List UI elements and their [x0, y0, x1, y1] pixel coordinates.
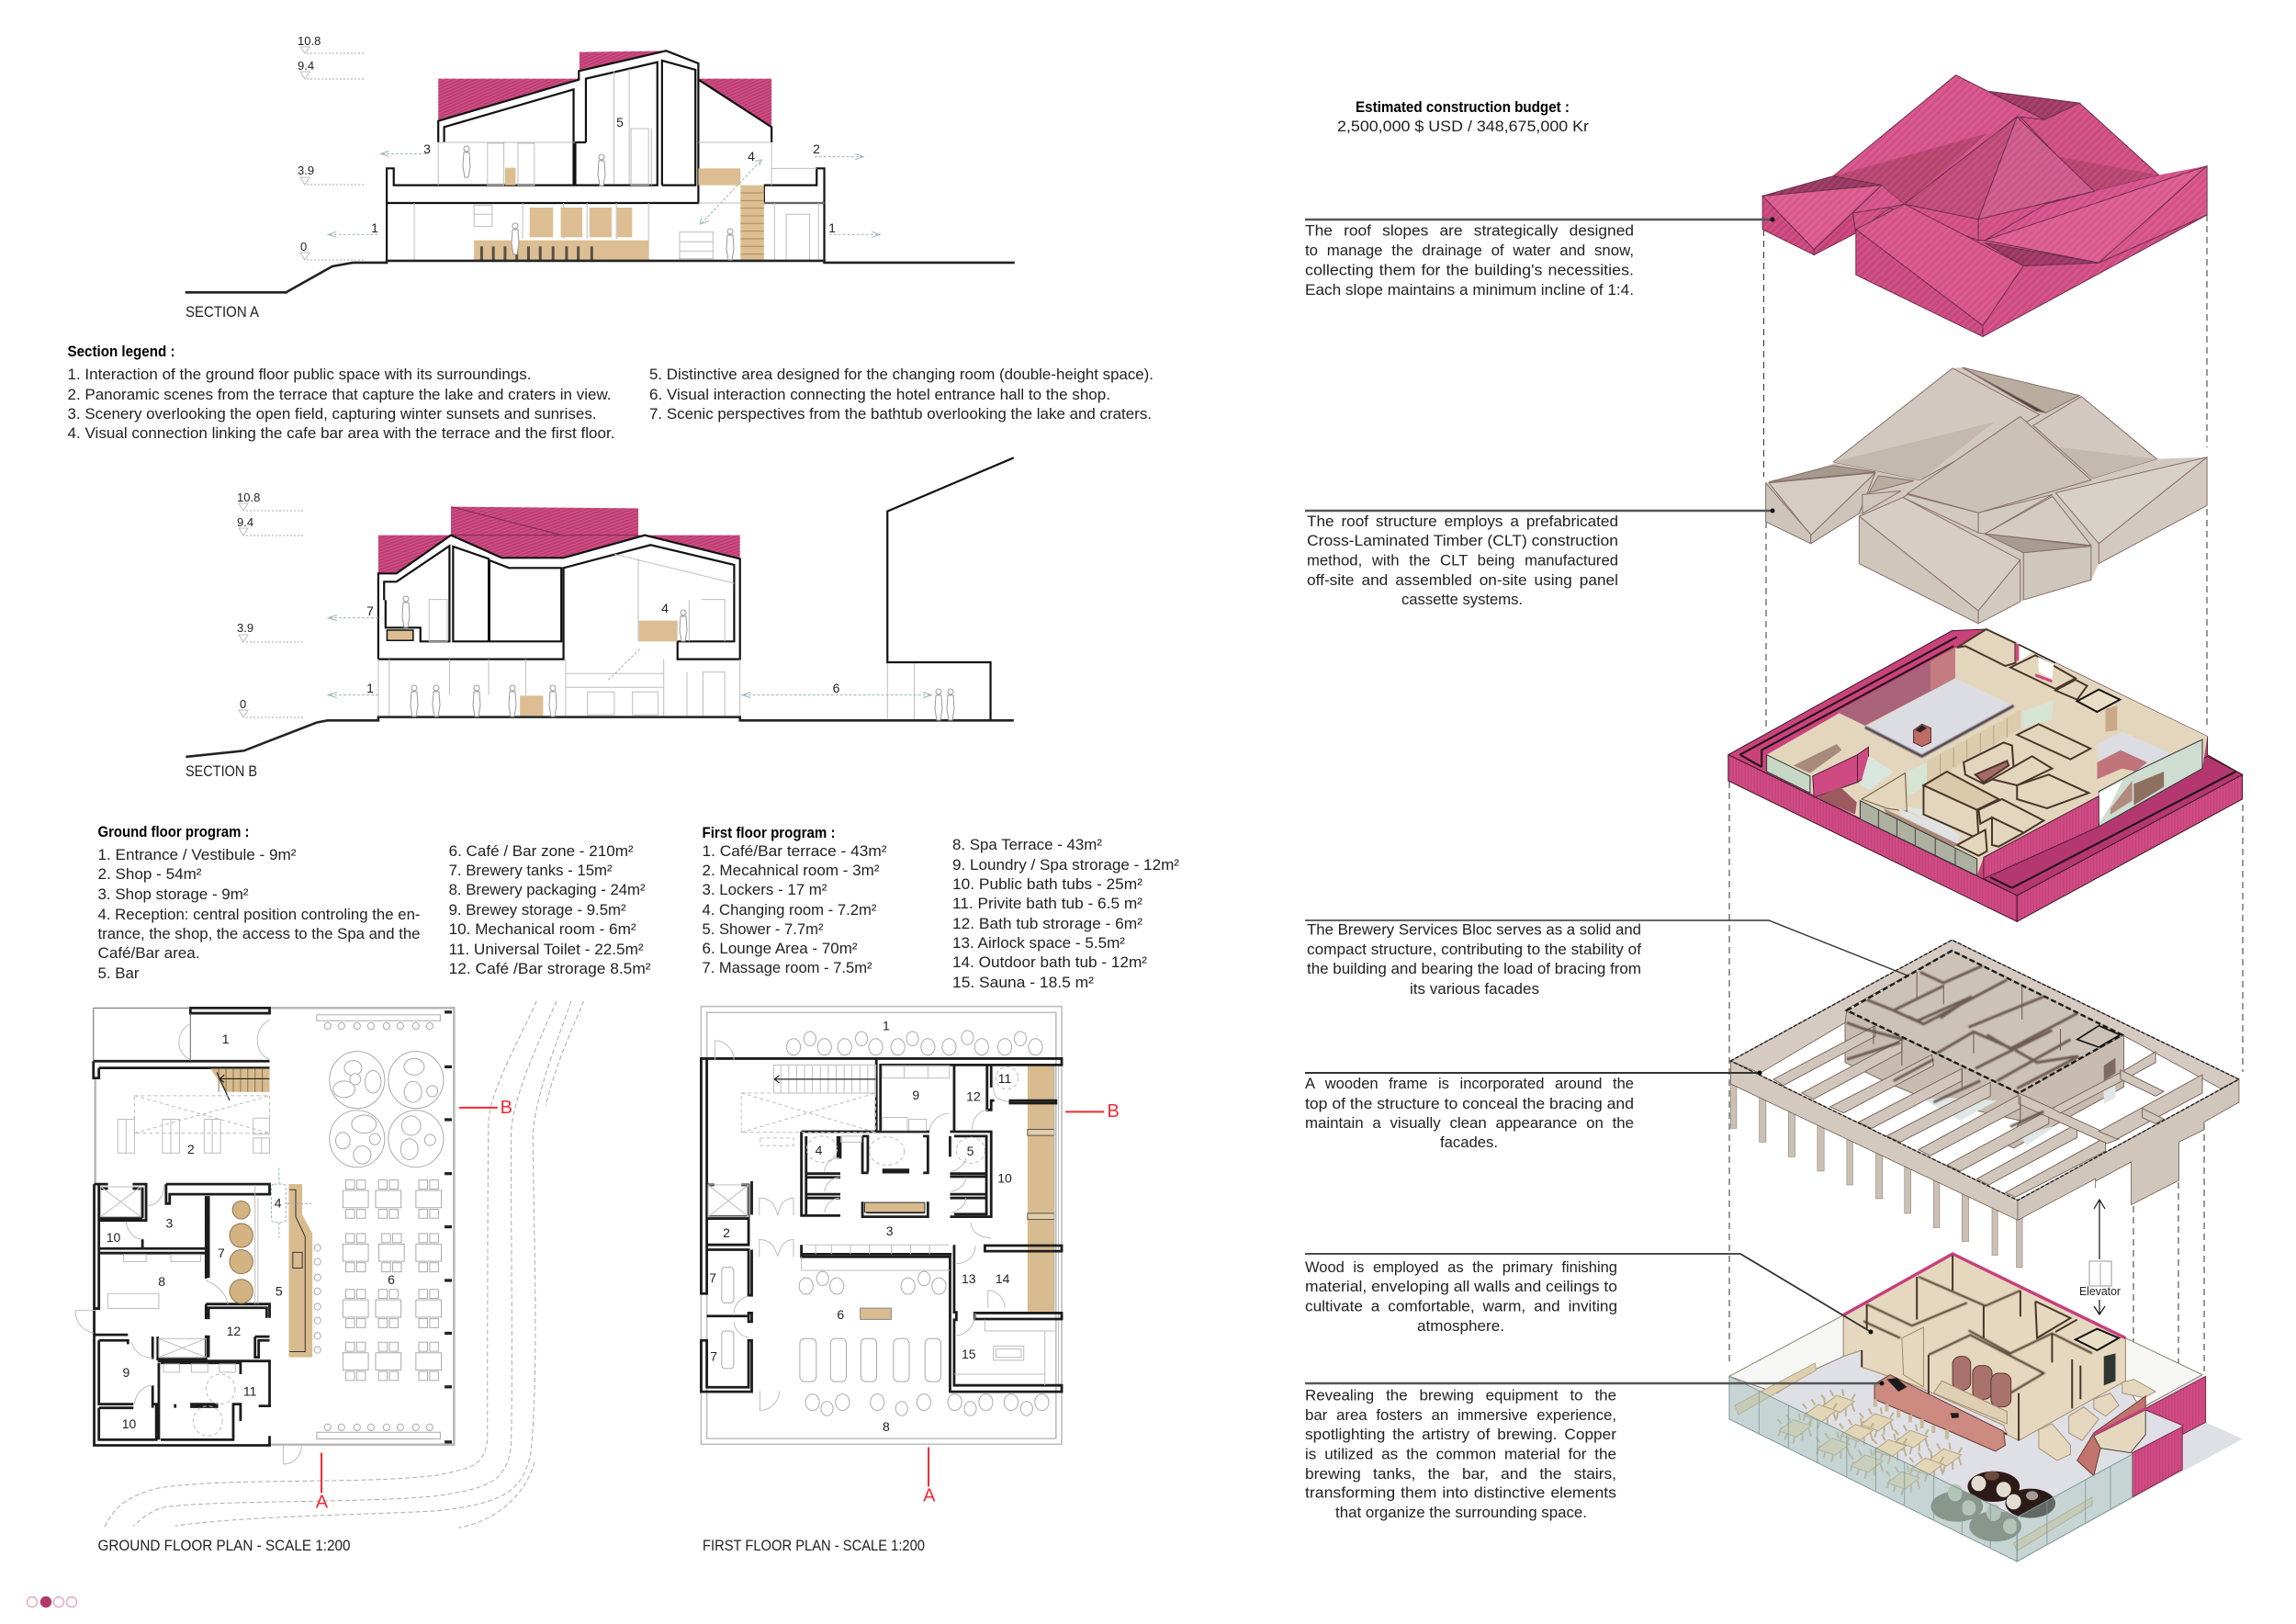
pink shell [1728, 629, 2243, 921]
level markers section B: 10.8 [237, 491, 260, 504]
stair [210, 1068, 270, 1100]
section B numbers: 4 [661, 601, 669, 615]
shelf [1902, 1327, 1923, 1387]
text: roof slopes [1305, 222, 1634, 299]
section B building [186, 457, 1014, 757]
level markers section A: 3.9 [298, 164, 314, 177]
room numbers: 9 [122, 1365, 129, 1380]
first floor program [702, 824, 1180, 991]
section cut marks: B [501, 1098, 512, 1118]
text: roof structure: off-site and assembled on-site using panel [1307, 572, 1618, 589]
pink wall [1984, 796, 2099, 879]
text: wooden frame: maintain a visually clean appearance on the [1305, 1115, 1634, 1132]
lounge pods [1930, 1472, 2055, 1541]
massage tables [722, 1268, 734, 1369]
sauna bench [954, 1320, 1056, 1385]
section A building [186, 51, 1015, 293]
pedestal [1914, 724, 1930, 747]
section B numbers: 1 [366, 681, 374, 695]
caption: section A: SECTION A [186, 304, 259, 321]
room numbers: 8 [158, 1274, 165, 1289]
text: brewing equipment: brewing tanks, the bar, and the stairs, [1305, 1466, 1616, 1483]
text: brewing equipment: Revealing the brewing equipment to the [1305, 1387, 1616, 1404]
room numbers: 6 [837, 1307, 844, 1322]
first program list right: 10. Public bath tubs - 25m² [952, 876, 1143, 893]
doors [75, 1020, 301, 1464]
reception [279, 1168, 311, 1238]
legend items [68, 367, 1154, 442]
first program list right: 15. Sauna - 18.5 m² [952, 975, 1095, 991]
section A numbers: 5 [616, 115, 624, 130]
text: services bloc [1307, 922, 1641, 998]
leader: wooden frame [1305, 1071, 1761, 1075]
columns [1730, 1081, 2022, 1268]
text: roof slopes: The roof slopes are strategically designed [1305, 222, 1634, 239]
section B numbers [366, 601, 840, 695]
elevator shaft [2077, 690, 2120, 732]
lounge pods [330, 1052, 444, 1167]
ground program list left: 5. Bar [97, 965, 140, 982]
legend items: 1. Interaction of the ground floor public space with its surroundings. [68, 367, 531, 383]
room numbers: 2 [187, 1142, 195, 1156]
room numbers: 1 [883, 1019, 890, 1033]
stair [740, 186, 764, 260]
terrace outline [701, 1007, 1062, 1444]
bar base [1933, 1381, 2007, 1424]
caption: section B: SECTION B [186, 763, 257, 780]
first program list left [702, 843, 887, 976]
striped wood wall [1927, 710, 2020, 784]
room numbers: 15 [962, 1347, 976, 1361]
room numbers [709, 1019, 1012, 1434]
level markers section B: 9.4 [237, 515, 253, 529]
ground program list right: 9. Brewey storage - 9.5m² [449, 902, 626, 919]
bar stools [314, 1245, 321, 1353]
first program list left: 1. Café/Bar terrace - 43m² [702, 843, 887, 860]
brewing tanks [1953, 1357, 2011, 1407]
section A numbers: 3 [423, 141, 431, 156]
right lounge [2097, 732, 2202, 827]
room numbers: 10 [107, 1230, 120, 1245]
text: services bloc: compact structure, contributing to the stability of [1307, 942, 1641, 958]
text: wood finish: material, enveloping all walls and ceilings to [1305, 1279, 1617, 1295]
legend items: 3. Scenery overlooking the open field, capturing winter sunsets and sunrises. [68, 406, 597, 423]
room numbers: 11 [243, 1383, 257, 1398]
section B numbers: 7 [366, 603, 374, 618]
lounge chairs [800, 1338, 940, 1382]
services bloc walls [1845, 1010, 2124, 1148]
ground program list left: trance, the shop, the access to the Spa and the [97, 926, 421, 942]
ground program list left [97, 847, 421, 982]
wood interior [1767, 629, 2207, 875]
leader: services bloc [1305, 920, 1908, 976]
first program list right: 8. Spa Terrace - 43m² [952, 837, 1103, 853]
first program list right: 12. Bath tub strorage - 6m² [952, 916, 1143, 932]
core partitions [1863, 1277, 2092, 1393]
roof: pink section A [438, 51, 771, 127]
first program list right [952, 837, 1180, 991]
legend items: 7. Scenic perspectives from the bathtub overlooking the lake and craters. [649, 406, 1152, 423]
caption: first floor plan: FIRST FLOOR PLAN - SCALE 1:200 [703, 1538, 925, 1554]
first program list left: 7. Massage room - 7.5m² [702, 960, 872, 976]
text: brewing equipment: spotlighting the artistry of brewing. Copper [1305, 1427, 1617, 1443]
window benches [317, 1015, 440, 1439]
level markers section B: 3.9 [237, 621, 253, 635]
room numbers: 12 [966, 1089, 981, 1104]
pager dots [28, 1596, 77, 1607]
text: wood finish: cultivate a comfortable, warm, and inviting [1305, 1299, 1617, 1315]
axonometric: first floor [1728, 629, 2243, 921]
text: wooden frame: top of the structure to conceal the bracing and [1305, 1096, 1634, 1112]
glass infill [1898, 700, 2054, 836]
railings [1735, 1363, 2092, 1551]
room numbers: 4 [275, 1196, 282, 1211]
bar counter [288, 1184, 312, 1358]
people section A [463, 146, 734, 260]
room numbers: 7 [710, 1348, 717, 1363]
text: brewing equipment: is utilized as the common material for the [1305, 1446, 1616, 1462]
budget value: 2,500,000 $ USD / 348,675,000 Kr [1337, 118, 1590, 135]
glass facade [1729, 1376, 2133, 1562]
room numbers: 14 [996, 1271, 1010, 1286]
pink edge [1843, 1254, 2125, 1338]
room numbers [107, 1032, 395, 1431]
text: wooden frame [1305, 1076, 1634, 1151]
walls [701, 1058, 1062, 1393]
legend items: 5. Distinctive area designed for the changing room (double-height space). [649, 367, 1154, 383]
floor [1729, 1254, 2243, 1562]
frame faces [1730, 940, 2239, 1220]
exterior glazing [96, 1008, 454, 1445]
ground program list left: 1. Entrance / Vestibule - 9m² [97, 847, 297, 863]
section A numbers: 1 [828, 220, 836, 235]
copper stair [2077, 1396, 2145, 1476]
back glazing [1729, 1315, 2202, 1408]
axonometric: ground floor [1729, 1254, 2243, 1562]
level markers section A: 0 [300, 240, 307, 254]
grey floor [1865, 678, 2014, 756]
first program list left: 3. Lockers - 17 m² [702, 882, 827, 898]
ground program list right: 11. Universal Toilet - 22.5m² [449, 942, 644, 958]
text: wood finish [1305, 1259, 1617, 1335]
text: brewing equipment: that organize the surrounding space. [1335, 1505, 1587, 1521]
level markers section B [237, 491, 304, 717]
text: roof structure [1307, 513, 1618, 608]
first program list right: 13. Airlock space - 5.5m² [952, 935, 1126, 952]
room numbers: 6 [388, 1272, 395, 1287]
section B drawing [186, 457, 1014, 780]
ground program list left: 3. Shop storage - 9m² [97, 886, 249, 903]
contour lines [105, 1001, 584, 1528]
room numbers: 8 [883, 1419, 890, 1434]
shelving [2039, 1380, 2155, 1460]
room numbers: 12 [227, 1324, 241, 1338]
level markers section B: 0 [240, 697, 246, 711]
text: services bloc: its various facades [1410, 981, 1539, 998]
budget [1337, 98, 1590, 135]
pink glass wall [1837, 648, 1955, 726]
room numbers: 10 [997, 1171, 1012, 1186]
text: brewing equipment: transforming them into distinctive elements [1305, 1485, 1616, 1502]
text: roof structure: method, with the CLT being manufactured [1307, 553, 1618, 570]
ground program list right: 10. Mechanical room - 6m² [449, 921, 636, 938]
room numbers: 13 [962, 1271, 976, 1286]
bar counter [1874, 1375, 2006, 1451]
section cut marks: A [316, 1493, 329, 1512]
text: roof structure: Cross-Laminated Timber (CLT) construction [1307, 533, 1618, 549]
terrace seats [786, 1031, 1049, 1415]
text: wood finish: Wood is employed as the primary finishing [1305, 1259, 1617, 1276]
ground floor program [97, 823, 651, 982]
text: wood finish: atmosphere. [1417, 1318, 1504, 1335]
caption: ground floor plan: GROUND FLOOR PLAN - SCALE 1:200 [97, 1538, 351, 1554]
room numbers: 11 [998, 1071, 1012, 1086]
budget heading: Estimated construction budget : [1356, 98, 1570, 116]
section cut marks [923, 1101, 1120, 1506]
axonometric: timber frame [1730, 940, 2239, 1268]
first program list left: 2. Mecahnical room - 3m² [702, 863, 880, 879]
text: services bloc: The Brewery Services Bloc serves as a solid and [1307, 922, 1641, 939]
pool [1028, 1066, 1059, 1387]
section cut marks [316, 1098, 512, 1512]
room numbers: 5 [967, 1144, 974, 1158]
first program list left: 5. Shower - 7.7m² [702, 921, 824, 938]
cafe tables [343, 1180, 442, 1381]
doors and fixtures [715, 1041, 1008, 1411]
first heading: First floor program : [702, 824, 836, 841]
room numbers: 2 [723, 1225, 730, 1240]
roof openings [2015, 643, 2055, 682]
room numbers: 7 [218, 1246, 225, 1260]
bar stools [1875, 1399, 1947, 1439]
dashed frame outlines [1730, 940, 2239, 1201]
shop fixtures [134, 1096, 270, 1133]
ground program list right: 8. Brewery packaging - 24m² [449, 882, 646, 898]
room numbers: 1 [222, 1032, 230, 1046]
front glazing [1860, 801, 1977, 875]
text: roof slopes: to manage the drainage of water and snow, [1305, 242, 1634, 259]
service fixtures [101, 1185, 258, 1372]
level markers section A: 9.4 [298, 59, 314, 73]
ground floor plan [75, 1001, 584, 1528]
text: brewing equipment [1305, 1387, 1617, 1521]
ground program list right: 6. Café / Bar zone - 210m² [449, 843, 634, 860]
ground program list left: 2. Shop - 54m² [97, 866, 202, 883]
frame beams [1773, 1026, 2202, 1197]
section legend [68, 343, 1154, 442]
ground program list right [449, 843, 651, 977]
roof: pink section B [378, 507, 740, 573]
text: services bloc: the building and bearing the load of bracing from [1307, 961, 1641, 977]
stair [741, 1065, 876, 1145]
left room [1767, 744, 1841, 793]
leader: roof structure [1305, 509, 1774, 513]
text: brewing equipment: bar area fosters an immersive experience, [1305, 1407, 1616, 1424]
walls [94, 1008, 270, 1445]
first floor plan [701, 1007, 1120, 1506]
text: roof slopes: collecting them for the building's necessities. [1305, 263, 1634, 279]
ground program list right: 7. Brewery tanks - 15m² [449, 863, 613, 879]
room numbers: 4 [816, 1143, 823, 1157]
wood core [1843, 1254, 2125, 1440]
elevator icon: Elevator [2079, 1284, 2122, 1298]
legend heading: Section legend : [68, 343, 174, 360]
brewery tanks [230, 1201, 253, 1303]
leader: brewing equipment [1305, 1382, 1885, 1385]
people section B [402, 596, 954, 720]
room numbers: 10 [122, 1416, 136, 1431]
laundry fixtures [708, 1066, 950, 1217]
first program list left: 4. Changing room - 7.2m² [702, 902, 877, 919]
room numbers: 5 [276, 1283, 283, 1298]
elevator icon [2079, 1200, 2122, 1314]
first program list right: 11. Privite bath tub - 6.5 m² [952, 896, 1143, 912]
text: wooden frame: facades. [1440, 1134, 1498, 1151]
pink entrance walls [2094, 1376, 2206, 1497]
axonometric: pink roof [1762, 75, 2207, 336]
leader: roof slopes [1305, 217, 1774, 222]
section A numbers: 4 [748, 149, 755, 164]
level markers section A: 10.8 [298, 34, 321, 48]
axonometric: CLT roof structure [1766, 367, 2207, 624]
section cut marks: B [1108, 1101, 1120, 1122]
text: wooden frame: A wooden frame is incorporated around the [1305, 1076, 1634, 1092]
dashed projection lines [1729, 215, 2243, 1451]
ground program list left: Café/Bar area. [97, 945, 200, 962]
section A numbers: 2 [813, 141, 820, 156]
first program list left: 6. Lounge Area - 70m² [702, 941, 858, 957]
section B numbers: 6 [833, 681, 840, 695]
legend items: 6. Visual interaction connecting the hotel entrance hall to the shop. [649, 387, 1110, 403]
section A numbers [371, 115, 836, 235]
cafe tables [1778, 1389, 1962, 1495]
lockers [802, 1202, 950, 1270]
room numbers: 3 [165, 1216, 173, 1231]
text: roof structure: cassette systems. [1401, 592, 1523, 608]
room numbers: 9 [912, 1088, 919, 1102]
legend items: 2. Panoramic scenes from the terrace that capture the lake and craters in view. [68, 387, 612, 403]
pink partition [1813, 747, 1868, 797]
text: roof slopes: Each slope maintains a minimum incline of 1:4. [1305, 282, 1634, 299]
section cut marks: A [923, 1486, 936, 1506]
legend items: 4. Visual connection linking the cafe bar area with the terrace and the first floor. [68, 425, 615, 442]
ground heading: Ground floor program : [97, 823, 250, 840]
section A drawing [186, 34, 1015, 321]
first program list right: 9. Loundry / Spa strorage - 12m² [952, 857, 1180, 874]
section A numbers: 1 [371, 220, 378, 235]
room partitions [1923, 629, 2090, 856]
ground program list left: 4. Reception: central position controling the en- [97, 907, 421, 923]
small terrace [1817, 756, 1907, 815]
room numbers: 7 [709, 1270, 716, 1285]
leader: wood finish [1305, 1254, 1874, 1334]
first program list right: 14. Outdoor bath tub - 12m² [952, 954, 1148, 971]
text: roof structure: The roof structure employs a prefabricated [1307, 513, 1618, 530]
services bloc top [1847, 951, 2122, 1093]
entrance block [2094, 1410, 2145, 1453]
lounge table [861, 1308, 891, 1319]
ground program list right: 12. Café /Bar strorage 8.5m² [449, 961, 651, 977]
timber shadows [1847, 966, 2078, 1127]
room numbers: 3 [886, 1224, 894, 1238]
level markers section A [298, 34, 365, 260]
